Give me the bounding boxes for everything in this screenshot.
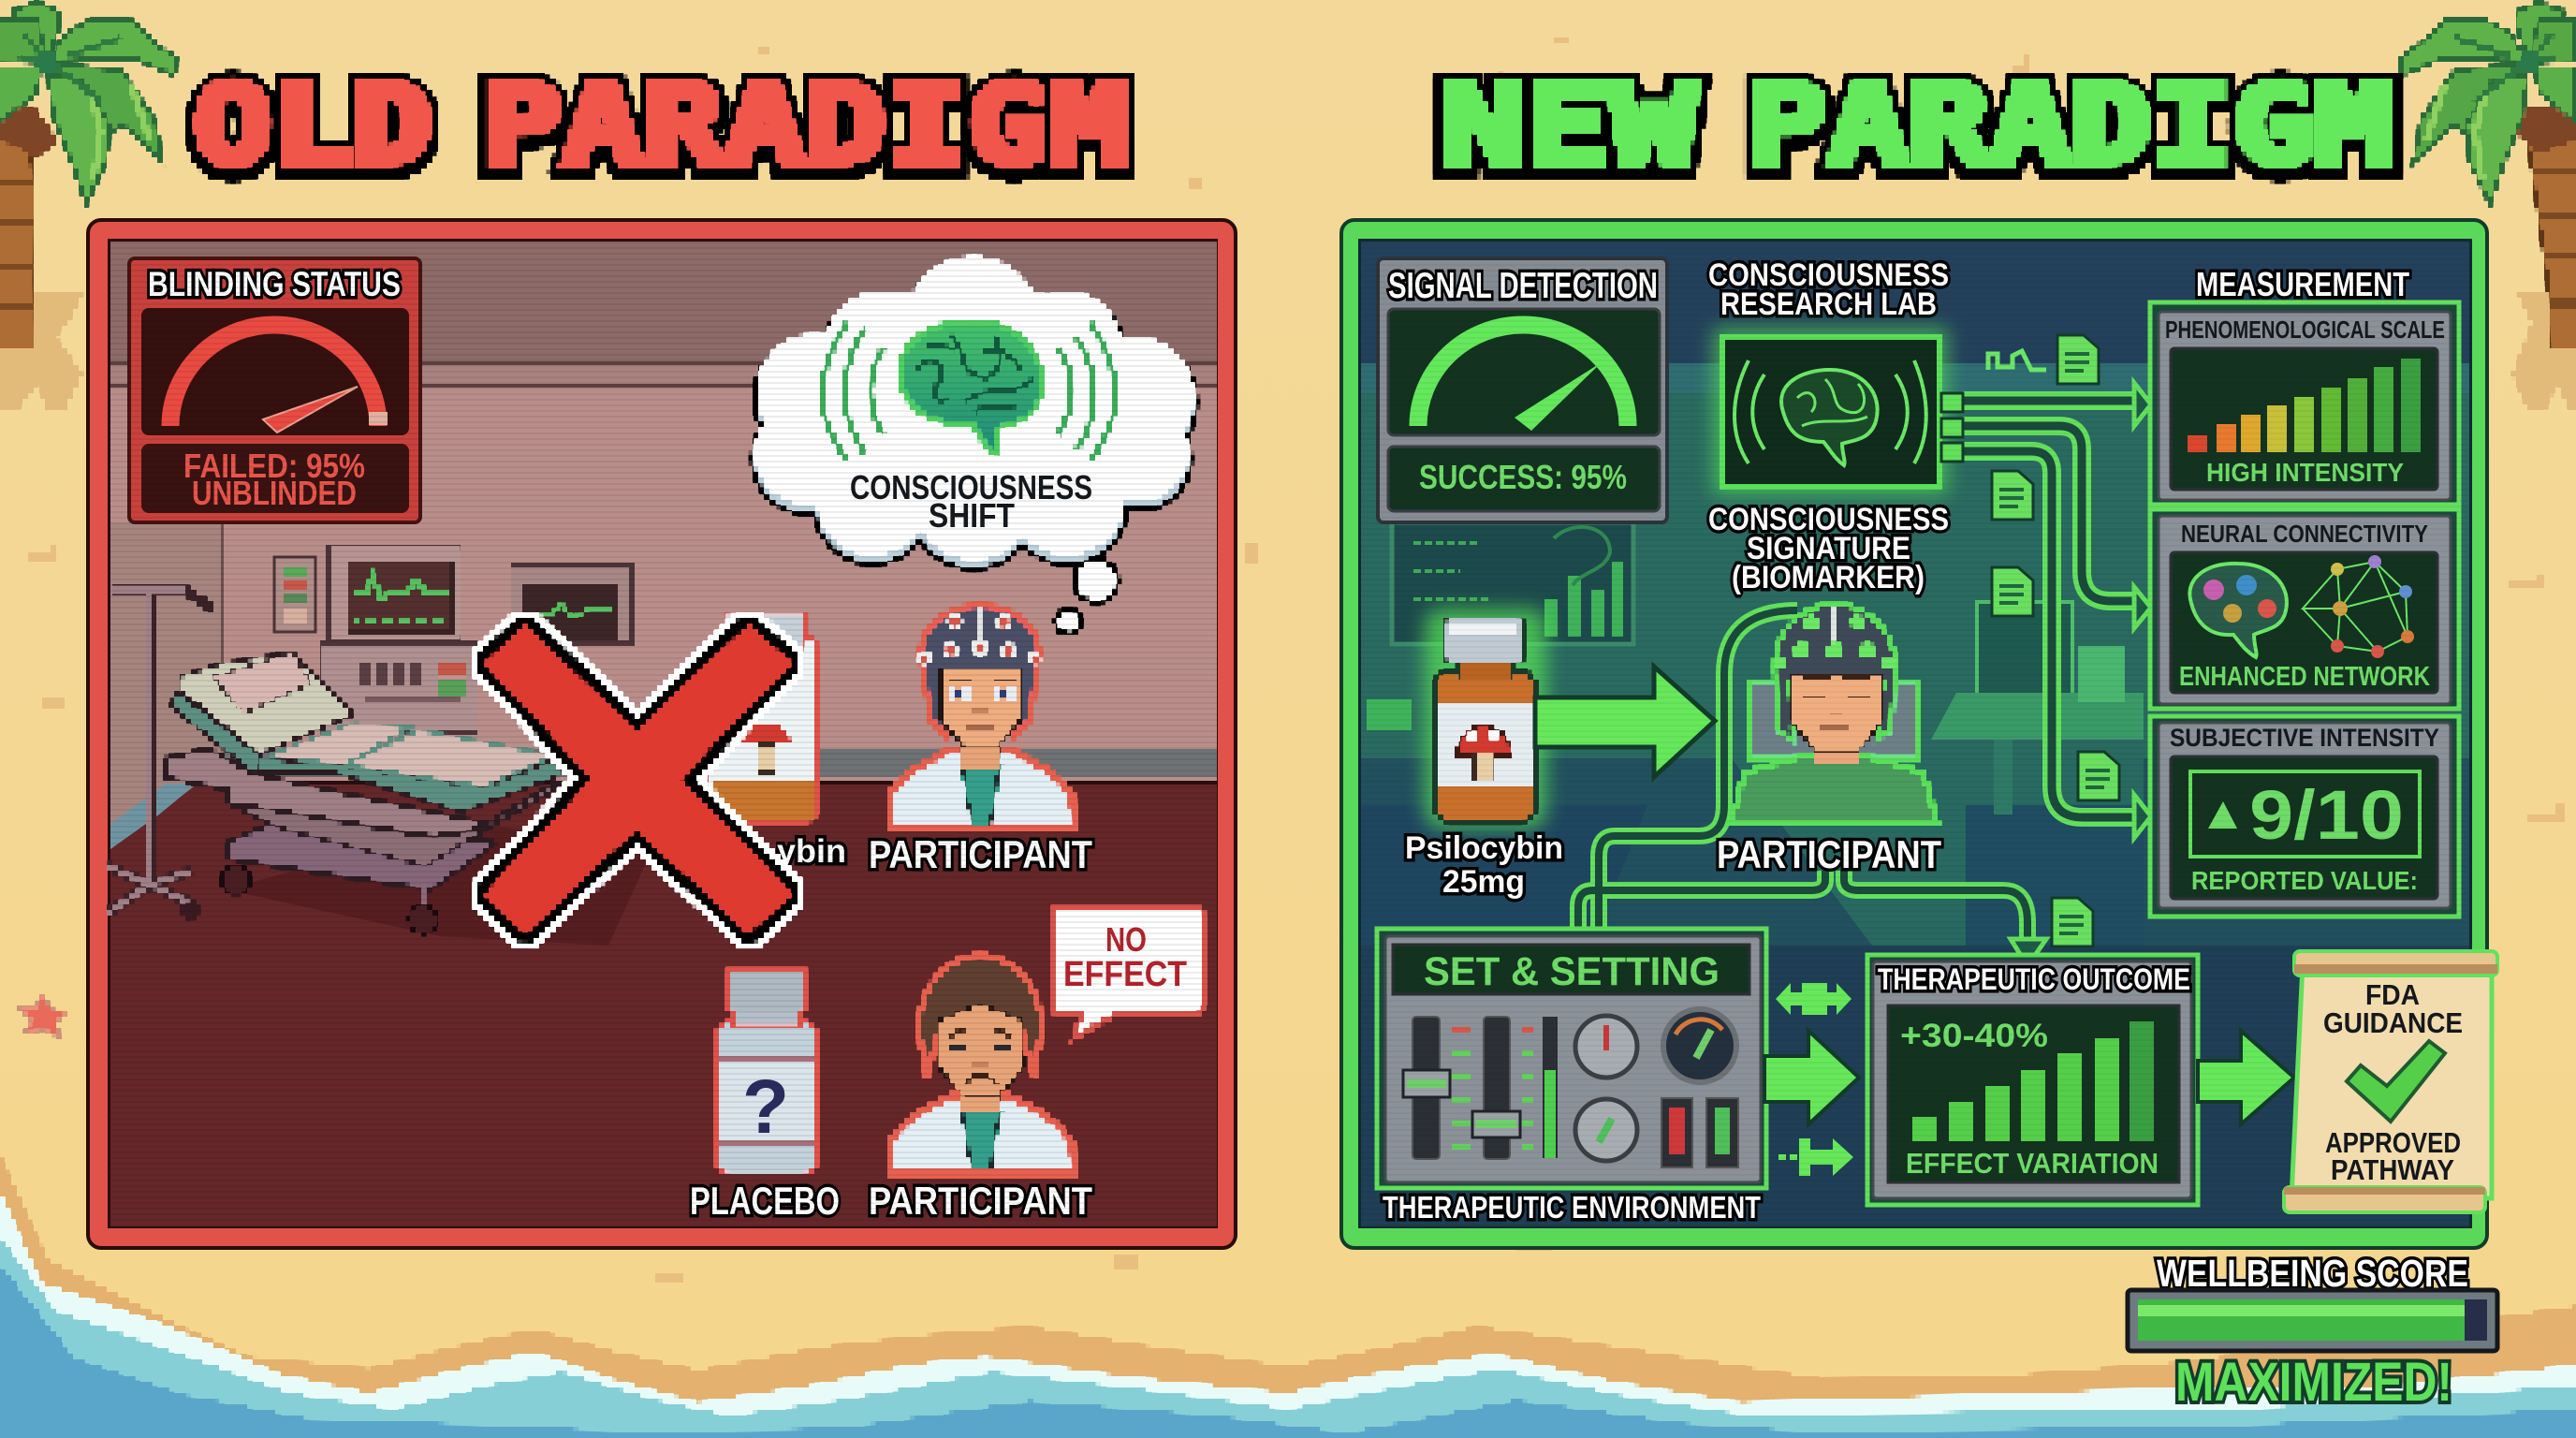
title: new paradigm: NEW xyxy=(1440,67,1697,197)
panel: phenomenological scale: HIGH INTENSITY xyxy=(2206,458,2404,487)
thought cloud: consciousness shift xyxy=(754,256,1194,634)
gauge: signal detection: SIGNAL DETECTION xyxy=(1388,266,1658,306)
title: old paradigm: OLD xyxy=(193,60,432,189)
left palm tree xyxy=(0,3,176,408)
title: old paradigm: PARADIGM xyxy=(481,60,1129,189)
lab background xyxy=(1361,242,2469,1226)
panel: neural connectivity xyxy=(2150,509,2459,709)
panel: therapeutic outcome: THERAPEUTIC OUTCOME xyxy=(1878,962,2190,996)
icon: big red x xyxy=(484,624,792,934)
thought cloud: consciousness shift: CONSCIOUSNESS xyxy=(850,468,1092,506)
clinic room background xyxy=(110,242,1217,1226)
panel: therapeutic outcome: +30-40% xyxy=(1900,1018,2048,1054)
scroll: fda guidance: PATHWAY xyxy=(2331,1153,2454,1186)
panel: subjective intensity: REPORTED VALUE: xyxy=(2191,866,2418,895)
wellbeing score: MAXIMIZED! xyxy=(2175,1352,2452,1413)
title: old paradigm: PARADIGM xyxy=(481,60,1129,189)
panel: old paradigm xyxy=(88,220,1236,1248)
label: psilocybin 25mg: Psilocybin xyxy=(1405,830,1563,866)
scroll: fda guidance: FDA xyxy=(2365,978,2420,1011)
gauge: blinding status: FAILED: 95% xyxy=(183,447,365,485)
icon: placebo bottle: ? xyxy=(742,1064,789,1150)
wall control panel xyxy=(274,557,315,632)
title: old paradigm: OLD xyxy=(193,60,432,189)
speech bubble: no effect xyxy=(1052,906,1203,1037)
title: new paradigm: PARADIGM xyxy=(1747,60,2394,189)
heading: consciousness research lab xyxy=(1708,257,1949,322)
title: new paradigm xyxy=(1440,60,2394,197)
panel: therapeutic outcome xyxy=(1867,955,2198,1205)
title: new paradigm: PARADIGM xyxy=(1747,60,2394,189)
scroll: fda guidance: GUIDANCE xyxy=(2323,1006,2463,1039)
scroll: fda guidance: APPROVED xyxy=(2325,1126,2461,1159)
icon: network graph xyxy=(2303,555,2414,658)
heading: measurement: MEASUREMENT xyxy=(2196,265,2409,303)
heading: consciousness research lab: RESEARCH LAB xyxy=(1720,286,1937,322)
panel: phenomenological scale: PHENOMENOLOGICAL SCALE xyxy=(2165,315,2445,344)
icon: check mark xyxy=(2347,1041,2445,1122)
participant at rest with electrode cap xyxy=(1730,604,1938,825)
title: new paradigm: NEW xyxy=(1440,60,1697,189)
thought cloud: consciousness shift: SHIFT xyxy=(929,496,1015,535)
wellbeing score xyxy=(2128,1252,2497,1413)
wellbeing score: WELLBEING SCORE xyxy=(2157,1252,2468,1295)
icon: placebo bottle xyxy=(716,968,817,1174)
speech bubble: no effect: EFFECT xyxy=(1063,955,1187,994)
gauge: blinding status: UNBLINDED xyxy=(192,474,357,512)
panel: phenomenological scale xyxy=(2150,302,2459,505)
sad participant xyxy=(889,955,1075,1173)
gauge: blinding status xyxy=(129,258,420,522)
label: participant: PARTICIPANT xyxy=(1717,832,1941,876)
pipe arrow heads xyxy=(2011,383,2151,966)
sliders xyxy=(1403,1017,1558,1159)
label: participant: PARTICIPANT xyxy=(869,1179,1092,1223)
title: old paradigm: PARADIGM xyxy=(481,67,1129,197)
title: new paradigm: PARADIGM xyxy=(1747,67,2394,197)
speech bubble: no effect: NO xyxy=(1105,920,1147,959)
label: therapeutic environment: THERAPEUTIC ENVIRONMENT xyxy=(1383,1190,1761,1225)
panel: set and setting: SET & SETTING xyxy=(1424,949,1720,994)
panel: subjective intensity xyxy=(2150,716,2459,917)
heading: consciousness signature biomarker: CONSCIOUSNESS xyxy=(1708,502,1949,537)
arrow: outcome to fda xyxy=(2198,1031,2294,1124)
icon: psilocybin bottle xyxy=(1425,609,1546,829)
scroll: fda guidance xyxy=(2284,951,2497,1212)
dials and switches xyxy=(1575,1009,1738,1167)
panel: new paradigm xyxy=(1341,220,2497,1248)
label: psilocybin 25mg: 25mg xyxy=(1442,864,1525,900)
arrow: bottle to participant xyxy=(1535,667,1715,777)
bar chart: effect xyxy=(1912,1021,2154,1141)
heading: consciousness signature biomarker: (BIOMARKER) xyxy=(1732,560,1925,595)
label: participant: PARTICIPANT xyxy=(869,832,1092,876)
data documents xyxy=(1988,335,2119,946)
icon: psilocybin bottle (old, partly covered) xyxy=(709,613,817,822)
title: old paradigm xyxy=(193,60,1129,197)
heading: consciousness signature biomarker xyxy=(1708,502,1949,595)
label: psilocybin 25mg xyxy=(1405,830,1563,900)
lab screen: neon brain xyxy=(1713,328,1948,495)
data pipes xyxy=(1578,401,2139,955)
IV stand xyxy=(108,590,212,919)
gauge: blinding status: BLINDING STATUS xyxy=(148,265,401,303)
panel: neural connectivity: ENHANCED NETWORK xyxy=(2179,662,2430,692)
arrow: setting to outcome xyxy=(1764,1031,1859,1124)
panel: neural connectivity: NEURAL CONNECTIVITY xyxy=(2181,520,2428,548)
heading: consciousness research lab: CONSCIOUSNESS xyxy=(1708,257,1949,293)
panel: subjective intensity: 9/10 xyxy=(2249,776,2404,854)
icon: green brain xyxy=(823,321,1115,459)
gauge: signal detection: SUCCESS: 95% xyxy=(1419,458,1627,496)
progress bar xyxy=(2128,1290,2497,1351)
label: psilocybin: Psilocybin xyxy=(678,833,846,870)
panel: set and setting xyxy=(1377,929,1766,1188)
label: placebo: PLACEBO xyxy=(690,1179,840,1223)
hospital monitors xyxy=(321,546,631,731)
lab connector ports xyxy=(1941,393,1963,462)
shoreline and water xyxy=(0,1154,2576,1438)
title: old paradigm: OLD xyxy=(193,67,432,197)
participant with electrode cap xyxy=(889,606,1075,827)
title: new paradigm: NEW xyxy=(1440,60,1697,189)
panel: subjective intensity: SUBJECTIVE INTENSITY xyxy=(2170,724,2439,752)
small icons: feedback arrows xyxy=(1776,983,1853,1176)
panel: therapeutic outcome: EFFECT VARIATION xyxy=(1906,1147,2159,1180)
bar chart: intensity xyxy=(2188,359,2421,452)
right palm tree xyxy=(2400,3,2576,408)
icon: colourful brain xyxy=(2189,564,2287,657)
heading: consciousness signature biomarker: SIGNATURE xyxy=(1747,531,1910,566)
gauge: signal detection xyxy=(1378,258,1667,522)
hospital bed xyxy=(166,653,564,933)
starfish xyxy=(18,994,67,1037)
